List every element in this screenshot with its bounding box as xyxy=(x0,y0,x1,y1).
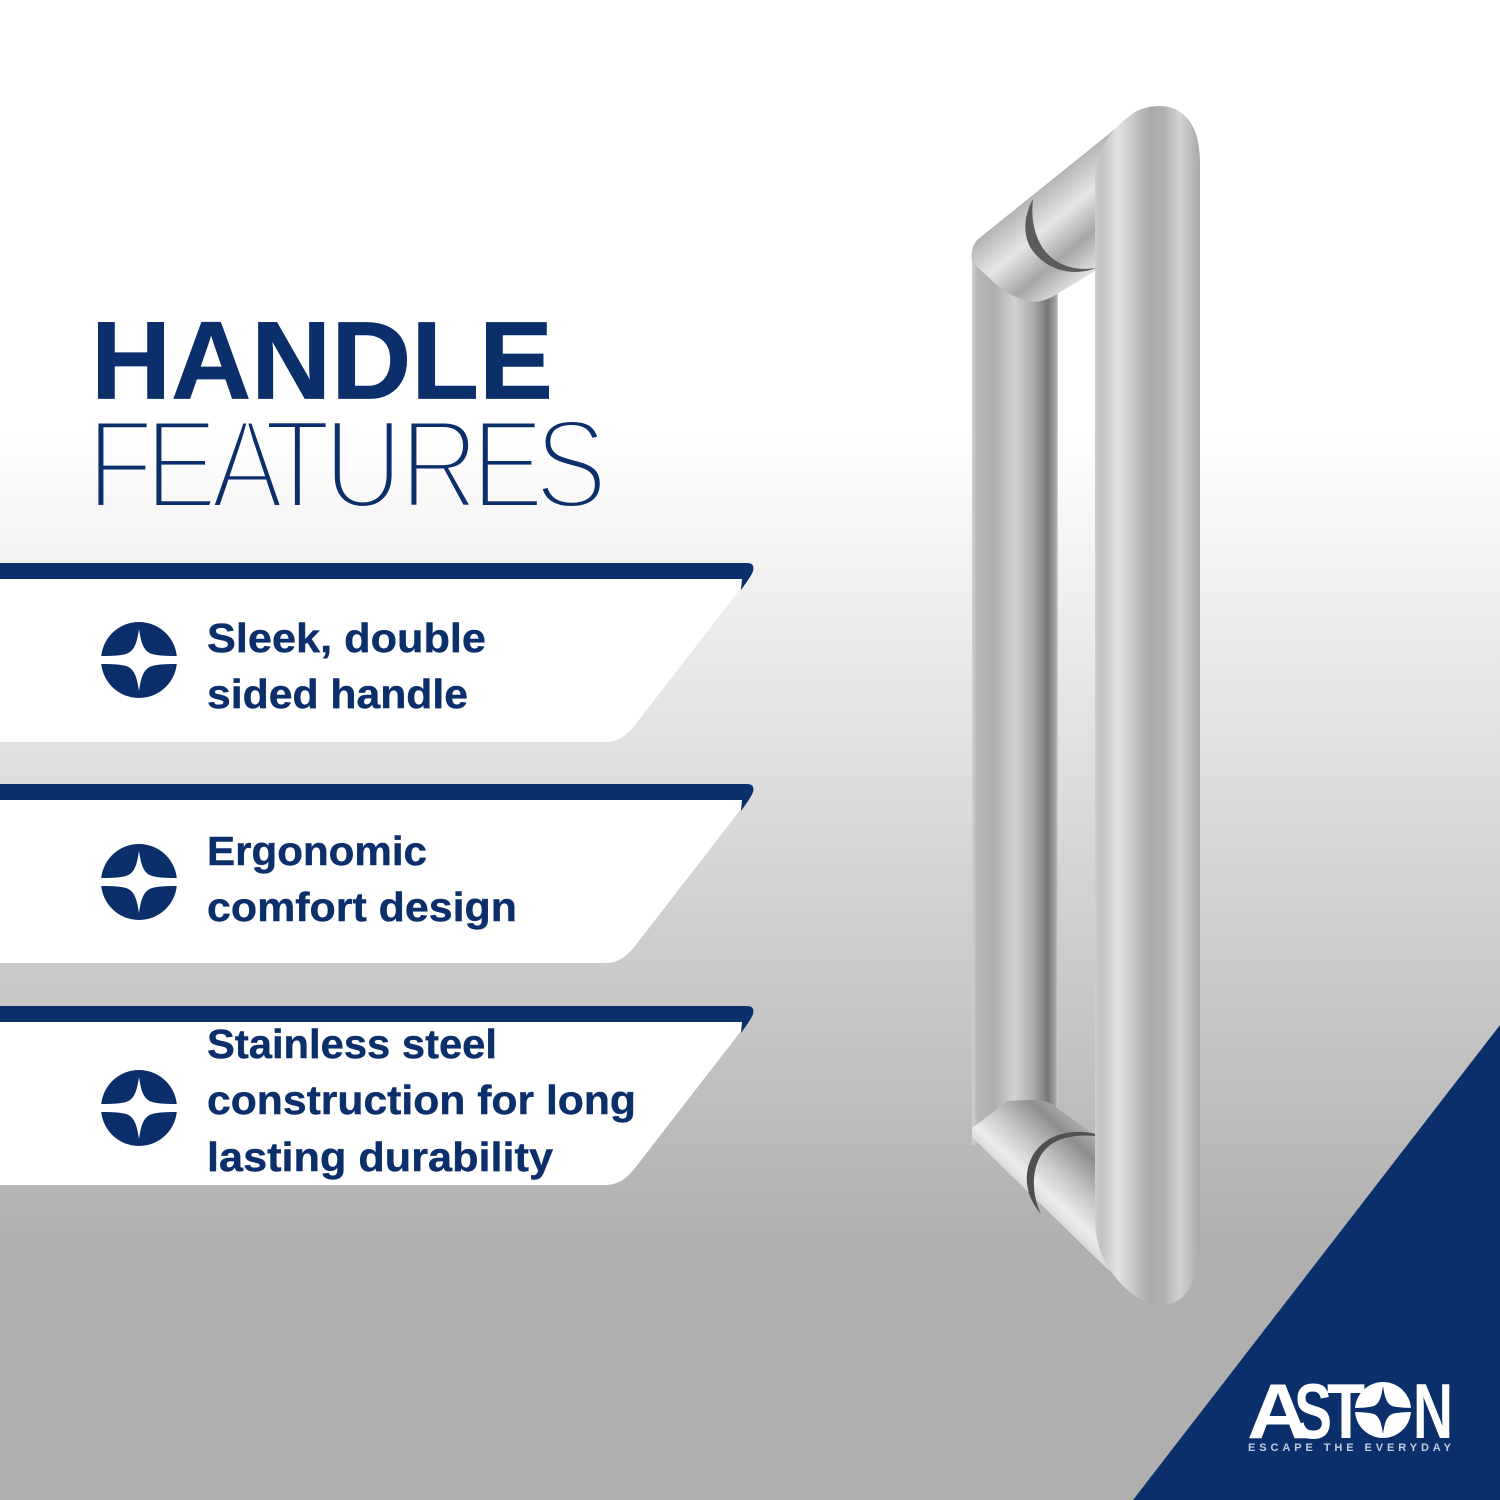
left bar xyxy=(972,255,1058,1145)
icon: star badge xyxy=(100,1070,178,1146)
bottom connector xyxy=(972,1100,1120,1280)
logo wordmark: T xyxy=(1327,1367,1365,1455)
logo tagline: ESCAPE THE EVERYDAY xyxy=(1248,1442,1452,1454)
feature text xyxy=(207,615,486,717)
logo wordmark xyxy=(1247,1367,1365,1455)
panel: feature 2 xyxy=(0,784,753,963)
title xyxy=(87,300,607,536)
feature text: Sleek, double xyxy=(207,615,486,661)
feature text: Stainless steel xyxy=(207,1021,497,1067)
logo wordmark: A xyxy=(1247,1367,1309,1455)
corner triangle xyxy=(1133,1025,1500,1500)
icon: star badge xyxy=(100,844,178,920)
title line: HANDLE: HANDLE xyxy=(91,300,553,422)
logo xyxy=(1247,1367,1453,1455)
feature text xyxy=(207,1021,636,1180)
feature text: Ergonomic xyxy=(207,828,427,874)
feature text: comfort design xyxy=(207,884,517,930)
panel: feature 1 xyxy=(0,563,753,742)
right bar xyxy=(1095,106,1200,1305)
top ring xyxy=(1025,199,1096,272)
panel: feature 3 xyxy=(0,1006,753,1185)
feature text xyxy=(207,828,517,930)
title line: FEATURES: FEATURES xyxy=(87,394,607,536)
feature text: construction for long xyxy=(207,1077,636,1123)
logo letter N: N xyxy=(1413,1367,1453,1455)
feature text: lasting durability xyxy=(207,1134,553,1180)
top connector xyxy=(972,125,1120,302)
feature text: sided handle xyxy=(207,671,468,717)
logo O: star in circle xyxy=(1353,1382,1413,1438)
logo wordmark: S xyxy=(1294,1367,1332,1455)
icon: star badge xyxy=(100,622,178,698)
bottom ring xyxy=(1027,1132,1096,1214)
product: door pull handle xyxy=(972,106,1200,1305)
